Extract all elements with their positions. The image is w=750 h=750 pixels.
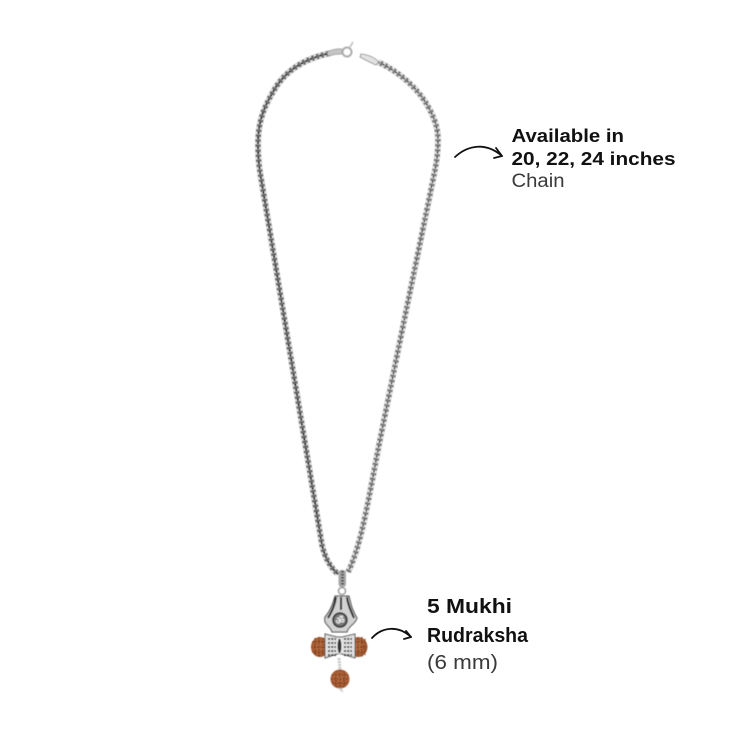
rudraksha heading (427, 595, 529, 647)
right rudraksha bead (348, 637, 368, 657)
trishul pendant head with om (325, 596, 357, 632)
rudraksha size: (6 mm) (427, 651, 498, 674)
hanging link (339, 658, 340, 670)
chain (258, 53, 438, 574)
chain callout (455, 125, 676, 192)
arrow: to chain label (455, 147, 502, 158)
rudraksha heading: 5 Mukhi (427, 595, 512, 618)
pendant bail (338, 570, 346, 594)
chain length heading (512, 125, 676, 169)
rudraksha heading: Rudraksha (427, 624, 529, 647)
left rudraksha bead (311, 637, 329, 657)
clasp (327, 42, 379, 65)
necklace (258, 42, 438, 693)
bottom rudraksha bead (330, 670, 350, 693)
chain label: Chain (512, 171, 564, 192)
trishul pendant head with om: ॐ (336, 615, 345, 627)
arrow: to rudraksha label (372, 629, 411, 639)
chain length heading: 20, 22, 24 inches (512, 148, 676, 169)
rudraksha callout (372, 595, 529, 674)
chain length heading: Available in (512, 125, 624, 146)
damru centre (325, 634, 355, 658)
